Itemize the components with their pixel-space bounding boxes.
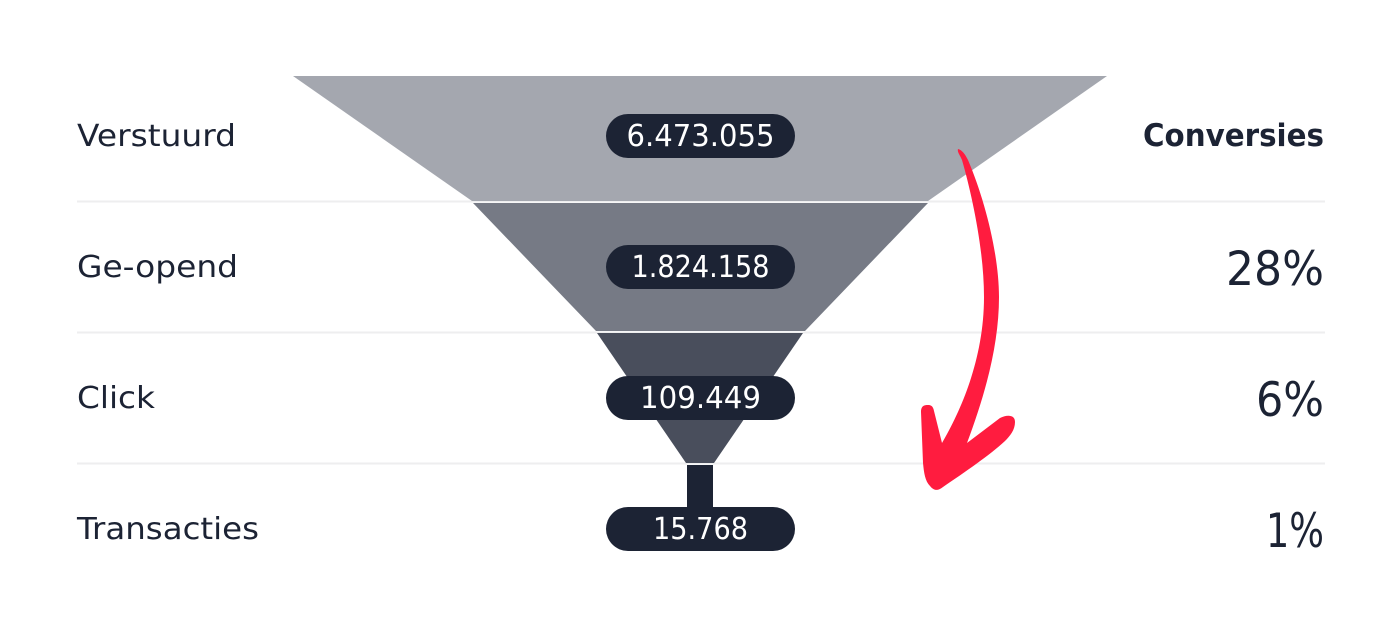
percentage: 28%: 28% (1226, 242, 1324, 297)
heading: Conversies: Conversies (1143, 118, 1324, 154)
funnel (293, 76, 1107, 511)
value pill: click: 109.449 (640, 381, 761, 416)
value pill: click (606, 376, 795, 420)
percentage: 6%: 6% (1256, 373, 1324, 428)
label: Verstuurd: Verstuurd (77, 119, 236, 154)
value pill: verstuurd: 6.473.055 (626, 119, 774, 154)
value pill: transacties (606, 507, 795, 551)
funnel segment: transacties (687, 465, 713, 511)
value pill: ge-opend: 1.824.158 (632, 250, 770, 285)
funnel segment: click (597, 333, 803, 463)
funnel segment: ge-opend (473, 203, 928, 331)
value pill: transacties: 15.768 (653, 512, 748, 547)
label: Click: Click (77, 381, 156, 416)
funnel segment: verstuurd (293, 76, 1107, 201)
label: Ge-opend: Ge-opend (77, 250, 238, 285)
value pill: verstuurd (606, 114, 795, 158)
value pill: ge-opend (606, 245, 795, 289)
arrow (921, 149, 1015, 490)
label: Transacties: Transacties (76, 512, 259, 547)
percentage: 1%: 1% (1266, 504, 1324, 559)
